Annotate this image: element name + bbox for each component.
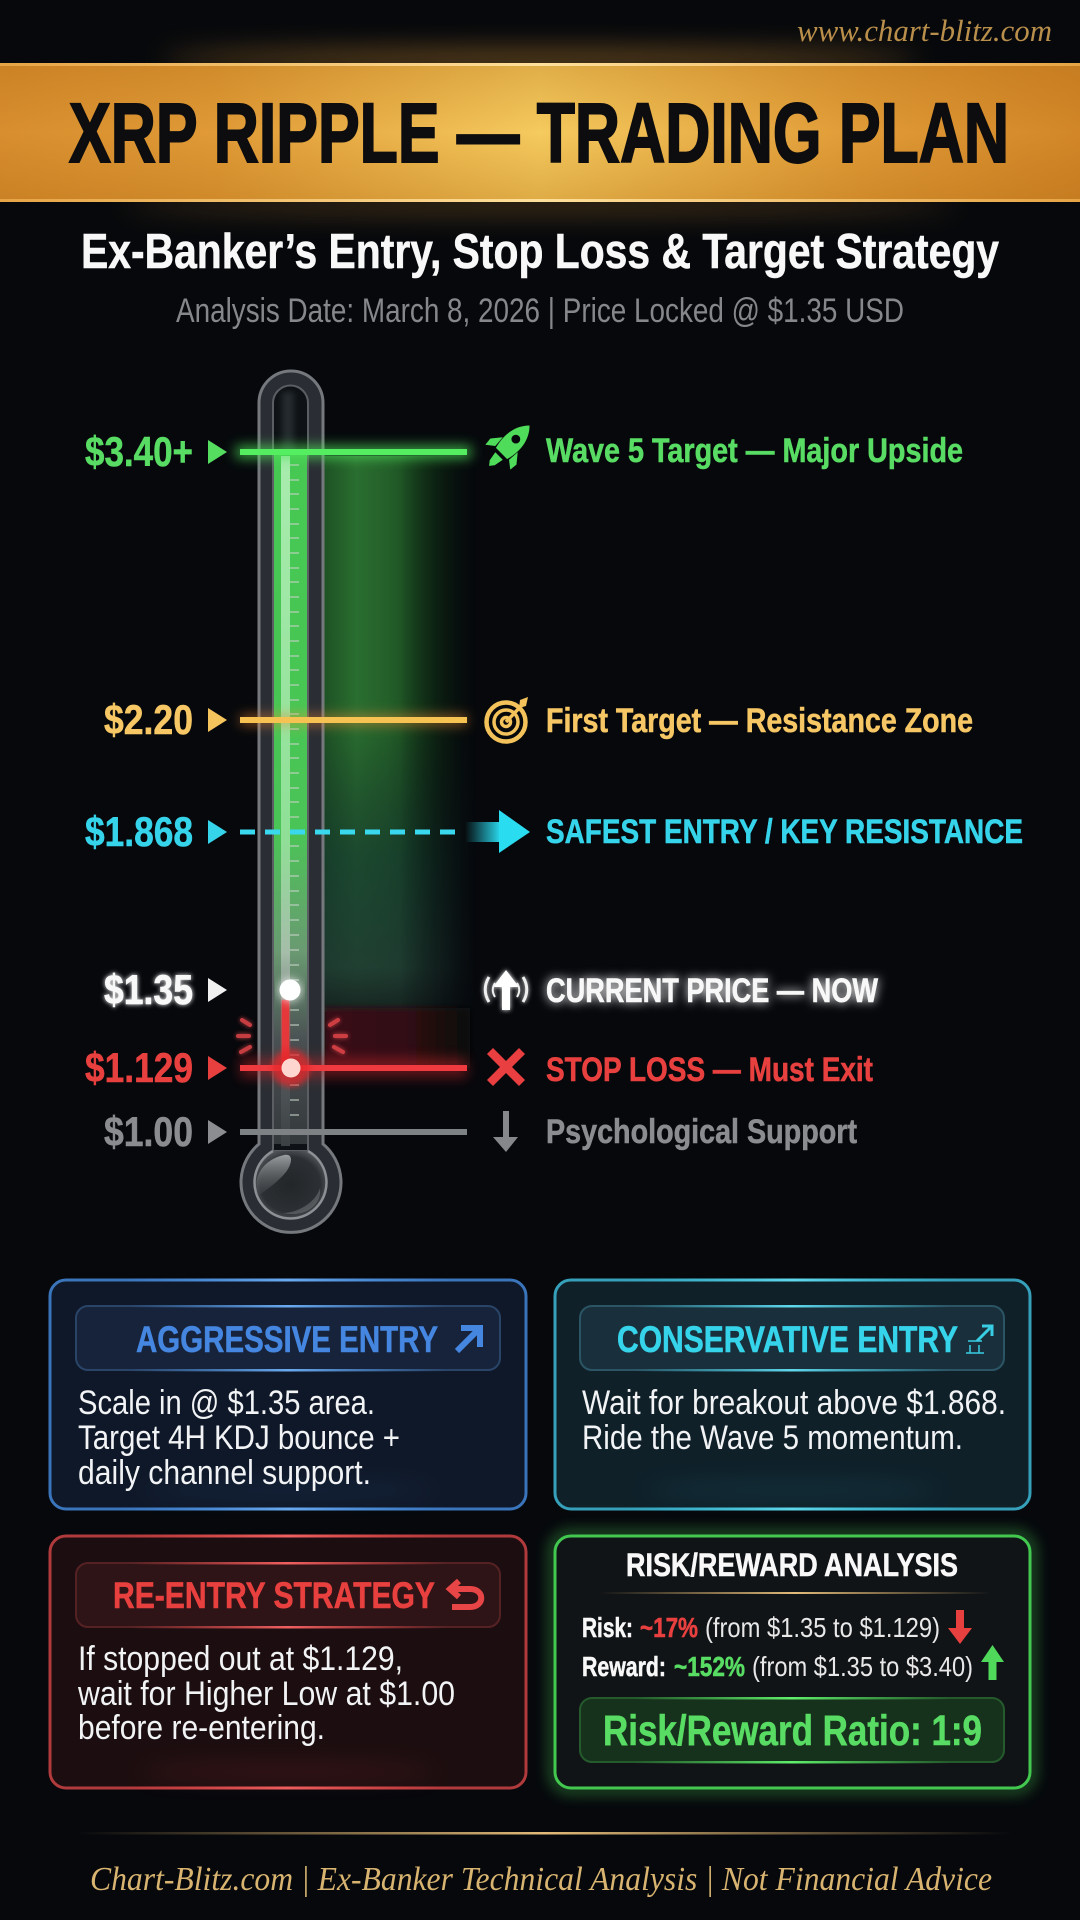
price label: 1.35: $1.35 [104,966,193,1013]
icon: target [486,697,528,742]
thermometer chart [236,371,478,1232]
website url: www.chart-blitz.com [797,13,1052,48]
label: stop loss: STOP LOSS — Must Exit [546,1051,873,1089]
red column [282,1000,289,1068]
alarm burst ticks [238,1020,346,1052]
panel: risk/reward analysis [553,1534,1032,1790]
label: wave 5 target: Wave 5 Target — Major Upside [546,432,963,470]
price label: 3.40: $3.40+ [85,428,193,475]
body text: re-entry strategy: If stopped out at $1.129, [78,1640,403,1678]
panel: re-entry strategy [50,1534,526,1790]
body text: re-entry strategy: wait for Higher Low at $1.00 [77,1675,455,1713]
icon: cross [490,1051,522,1083]
risk line [582,1610,972,1644]
glass tube [241,371,341,1232]
reward line: Reward: [582,1651,666,1682]
header pill: re-entry strategy [76,1562,500,1628]
level line: 2.20 [240,715,467,725]
green target zone [324,456,460,1012]
level line: 1.35 [300,988,463,992]
stop loss marker [272,1049,310,1087]
risk line: (from $1.35 to $1.129) [705,1612,940,1643]
header pill: re-entry strategy: RE-ENTRY STRATEGY [113,1575,435,1616]
title banner [0,52,1080,212]
body text: aggressive entry: Scale in @ $1.35 area. [78,1384,375,1422]
level line: 1.129 [240,1058,467,1078]
risk line: Risk: [582,1612,633,1643]
ratio pill [580,1697,1004,1764]
header pill: conservative entry: CONSERVATIVE ENTRY [617,1319,958,1360]
icon: cyan arrow [465,810,530,853]
icon: rocket [476,412,543,479]
body text: aggressive entry: Target 4H KDJ bounce + [78,1419,400,1457]
body text: re-entry strategy: before re-entering. [78,1709,325,1747]
price label: 1.00: $1.00 [104,1108,193,1155]
label: current price: CURRENT PRICE — NOW [546,972,879,1010]
panel: conservative entry [555,1278,1030,1510]
price label: 2.20: $2.20 [104,696,193,743]
scale ticks [290,465,299,1115]
heading: risk/reward analysis: RISK/REWARD ANALYSIS [626,1547,958,1583]
header pill: conservative entry [580,1305,1004,1372]
panel: aggressive entry [50,1278,526,1510]
body text: aggressive entry [78,1384,400,1492]
risk line: ~17% [640,1612,698,1643]
level line: 1.00 [240,1129,467,1135]
label: psychological support: Psychological Support [546,1113,857,1151]
reward line: (from $1.35 to $3.40) [752,1651,973,1682]
thermometer bulb [254,1151,326,1218]
body text: conservative entry: Ride the Wave 5 momentum. [582,1419,963,1457]
current price marker [280,980,300,1000]
mercury column [274,454,307,1146]
price label: 1.129: $1.129 [85,1044,193,1091]
body text: re-entry strategy [77,1640,455,1747]
level line: 3.40 [236,446,471,458]
header pill: aggressive entry: AGGRESSIVE ENTRY [136,1319,438,1360]
reward line [582,1645,1004,1682]
body text: conservative entry [582,1384,1006,1457]
analysis date line: Analysis Date: March 8, 2026 | Price Locked @ $1.35 USD [176,292,904,330]
header pill: aggressive entry [76,1305,500,1372]
footer: Chart-Blitz.com | Ex-Banker Technical Analysis | Not Financial Advice [90,1861,992,1898]
label: first target: First Target — Resistance Zone [546,702,973,740]
level line: 1.868 [240,828,465,836]
icon: down arrow [493,1111,518,1152]
reward line: ~152% [674,1651,745,1682]
body text: conservative entry: Wait for breakout above $1.868. [582,1384,1006,1422]
price label: 1.868: $1.868 [85,808,193,855]
red risk zone [324,1008,470,1068]
ratio pill: Risk/Reward Ratio: 1:9 [603,1707,982,1755]
body text: aggressive entry: daily channel support. [78,1454,371,1492]
icon: up arrow with signal [485,970,527,1010]
